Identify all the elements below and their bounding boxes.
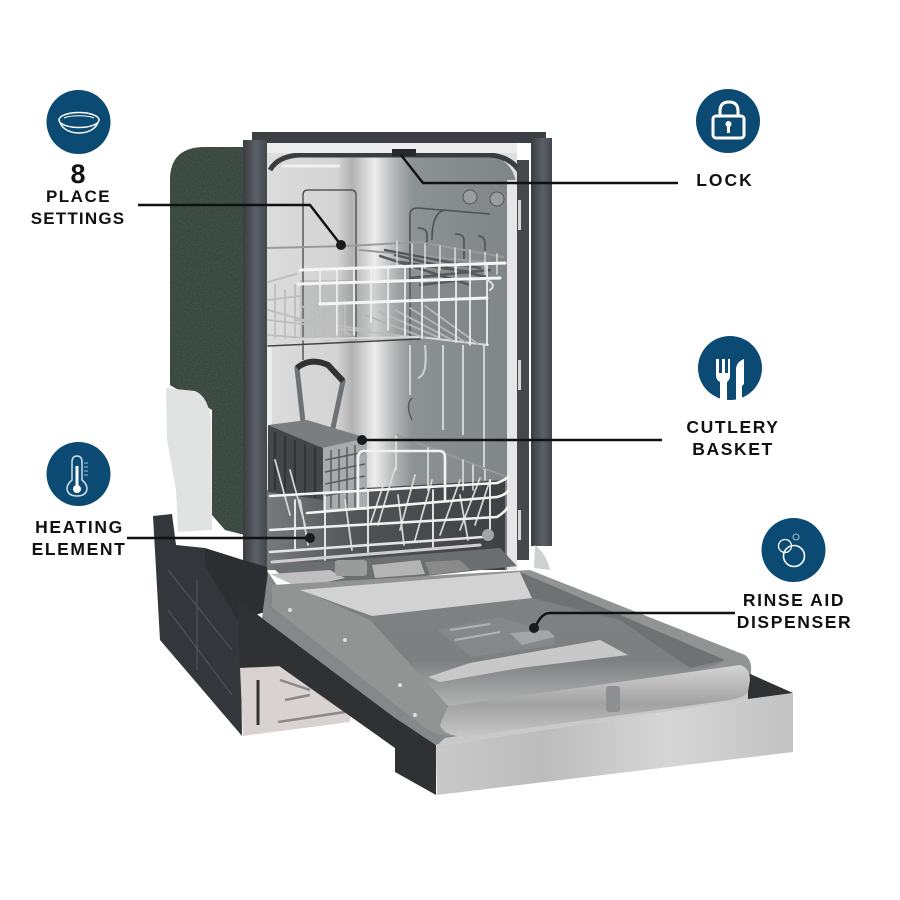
upper rack bbox=[268, 241, 505, 346]
icon: lock bbox=[696, 89, 760, 153]
door side rail bbox=[238, 600, 436, 795]
text: rinse aid dispenser: RINSE AID bbox=[743, 590, 845, 610]
text: 8 place settings bbox=[31, 159, 125, 228]
icon: plate bbox=[46, 90, 110, 154]
text: heating element bbox=[32, 517, 126, 559]
tub floor and sump bbox=[270, 548, 517, 590]
text: 8 place settings: PLACE bbox=[46, 187, 111, 206]
leader line: cutlery basket bbox=[357, 435, 662, 445]
text: lock: LOCK bbox=[696, 170, 754, 190]
tub interior bbox=[267, 150, 526, 570]
far tray wall bbox=[300, 572, 532, 616]
icon: bubbles bbox=[762, 518, 826, 582]
tray front lip bbox=[440, 665, 750, 736]
cutlery basket bbox=[268, 362, 367, 510]
icon: thermometer bbox=[46, 442, 110, 506]
door side flange bbox=[262, 572, 460, 745]
dispenser bbox=[437, 617, 555, 657]
lower rack bbox=[270, 435, 508, 562]
open door bbox=[238, 570, 793, 795]
text: cutlery basket: BASKET bbox=[692, 439, 774, 459]
silver side bracket bbox=[240, 664, 350, 736]
text: rinse aid dispenser bbox=[737, 590, 852, 632]
door frame posts bbox=[205, 132, 552, 620]
raised floor plate bbox=[428, 640, 628, 682]
door tray floor bbox=[302, 572, 725, 708]
icon: fork and knife bbox=[698, 336, 762, 400]
foam block bbox=[166, 388, 212, 532]
rear base panel bbox=[153, 514, 242, 736]
text: rinse aid dispenser: DISPENSER bbox=[737, 612, 852, 632]
text: cutlery basket: CUTLERY bbox=[686, 417, 780, 437]
dark corner behind lip bbox=[748, 673, 793, 699]
dishwasher illustration bbox=[153, 132, 793, 795]
text: heating element: HEATING bbox=[35, 517, 124, 537]
leader line: rinse aid dispenser bbox=[529, 613, 735, 633]
text: heating element: ELEMENT bbox=[32, 539, 126, 559]
door latch bbox=[606, 686, 620, 712]
text: 8 place settings: 8 bbox=[70, 159, 86, 189]
insulation blanket bbox=[170, 147, 245, 535]
leader line: heating element bbox=[127, 533, 315, 543]
leader line: lock bbox=[401, 155, 678, 183]
silver panel top edge bbox=[436, 692, 793, 746]
stainless door panel bbox=[436, 693, 793, 795]
door tray rim bbox=[272, 570, 751, 736]
text: 8 place settings: SETTINGS bbox=[31, 209, 125, 228]
text: cutlery basket bbox=[686, 417, 780, 459]
leader line: place settings bbox=[138, 205, 346, 250]
